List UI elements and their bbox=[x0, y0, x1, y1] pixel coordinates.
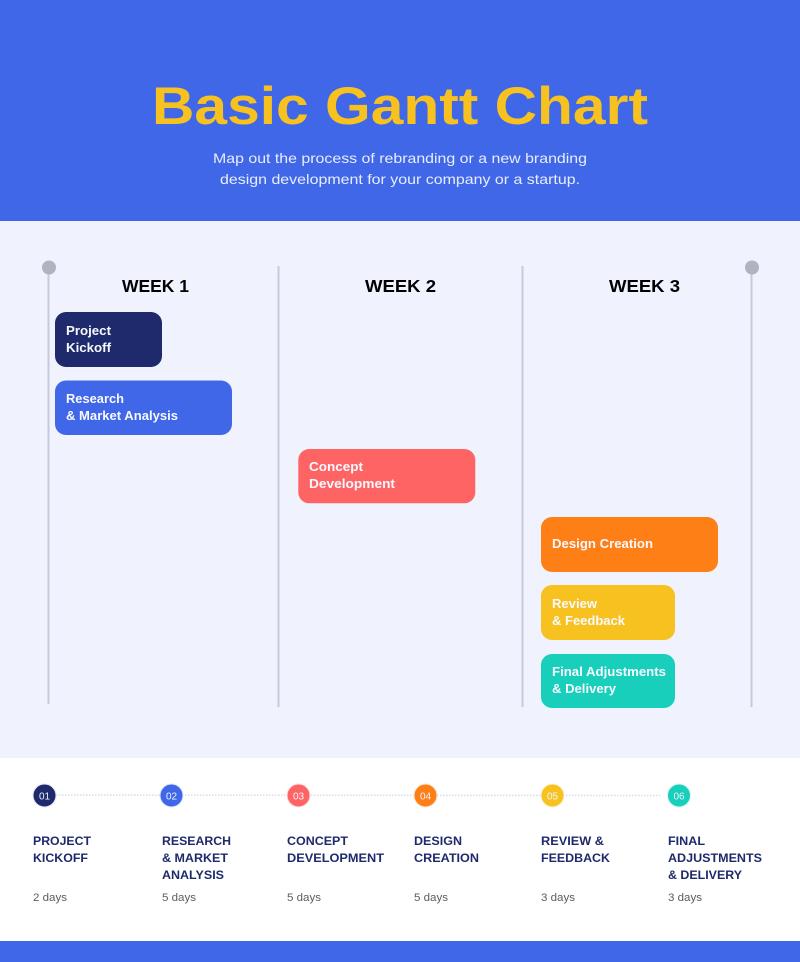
step 06 bbox=[668, 784, 762, 904]
step 02: 02 bbox=[166, 792, 177, 802]
step 01: 2 days bbox=[33, 892, 67, 904]
footer band bbox=[0, 941, 800, 962]
step 03: 5 days bbox=[287, 892, 321, 904]
bar: concept development bbox=[298, 449, 475, 503]
step 04: DESIGN bbox=[414, 834, 462, 848]
bar: project kickoff: Kickoff bbox=[66, 341, 112, 355]
bar: research and market analysis: & Market Analysis bbox=[66, 409, 178, 423]
bar: final adjustments and delivery: Final Adjustments bbox=[552, 665, 666, 679]
timeline end marker bbox=[745, 260, 759, 707]
step 06: & DELIVERY bbox=[668, 868, 742, 882]
connector line bbox=[56, 794, 660, 796]
step 01: 01 bbox=[39, 792, 50, 802]
step 02 bbox=[160, 784, 231, 904]
title: Basic Gantt Chart bbox=[152, 77, 648, 136]
step 06: 3 days bbox=[668, 892, 702, 904]
week 1 heading: WEEK 1 bbox=[122, 276, 189, 296]
step 04: CREATION bbox=[414, 851, 479, 865]
week 3 divider bbox=[522, 266, 524, 707]
step 02: 5 days bbox=[162, 892, 196, 904]
subtitle: Map out the process of rebranding or a new branding bbox=[213, 150, 587, 166]
step 05: REVIEW & bbox=[541, 834, 604, 848]
step 04: 04 bbox=[420, 792, 431, 802]
step 02: & MARKET bbox=[162, 851, 228, 865]
bar: review and feedback bbox=[541, 585, 675, 640]
step 06: 06 bbox=[673, 792, 685, 802]
step 01: KICKOFF bbox=[33, 851, 88, 865]
step 05: 3 days bbox=[541, 892, 575, 904]
step 03 bbox=[287, 784, 384, 904]
bar: concept development: Development bbox=[309, 477, 396, 491]
bar: final adjustments and delivery bbox=[541, 654, 675, 708]
week 2 divider bbox=[278, 266, 280, 707]
step 05: 05 bbox=[547, 792, 558, 802]
timeline start marker bbox=[42, 260, 56, 704]
bar: review and feedback: Review bbox=[552, 597, 597, 611]
step 06: FINAL bbox=[668, 834, 705, 848]
step 02: RESEARCH bbox=[162, 834, 231, 848]
bar: concept development: Concept bbox=[309, 460, 364, 474]
step 03: 03 bbox=[293, 792, 304, 802]
panel: gantt chart bbox=[0, 221, 800, 758]
bar: final adjustments and delivery: & Delivery bbox=[552, 682, 616, 696]
bar: project kickoff bbox=[55, 312, 162, 367]
step 06: ADJUSTMENTS bbox=[668, 851, 762, 865]
step 05 bbox=[541, 784, 610, 904]
step 01: PROJECT bbox=[33, 834, 91, 848]
header band bbox=[0, 0, 800, 221]
step 05: FEEDBACK bbox=[541, 851, 610, 865]
step 01 bbox=[33, 784, 91, 904]
week 2 heading: WEEK 2 bbox=[365, 276, 436, 296]
bar: research and market analysis: Research bbox=[66, 392, 124, 406]
step 03: DEVELOPMENT bbox=[287, 851, 384, 865]
subtitle: design development for your company or a startup. bbox=[220, 171, 580, 187]
bar: project kickoff: Project bbox=[66, 324, 112, 338]
step 02: ANALYSIS bbox=[162, 868, 224, 882]
bar: design creation: Design Creation bbox=[552, 537, 653, 551]
panel: task summary bbox=[33, 784, 762, 904]
week 3 heading: WEEK 3 bbox=[609, 276, 680, 296]
bar: review and feedback: & Feedback bbox=[552, 614, 625, 628]
step 04: 5 days bbox=[414, 892, 448, 904]
bar: design creation bbox=[541, 517, 718, 572]
step 04 bbox=[414, 784, 479, 904]
step 03: CONCEPT bbox=[287, 834, 348, 848]
subtitle bbox=[213, 150, 587, 187]
bar: research and market analysis bbox=[55, 380, 232, 435]
